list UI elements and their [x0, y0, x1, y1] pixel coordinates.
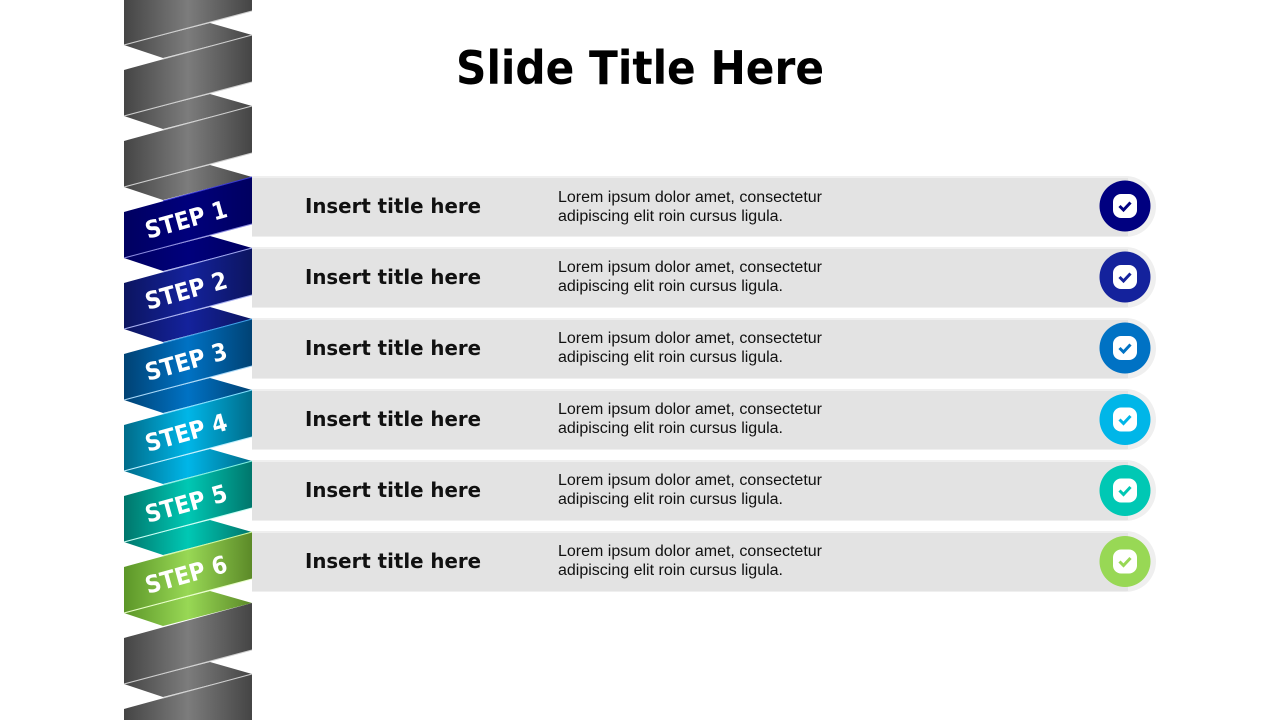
- row 6 description: adipiscing elit roin cursus ligula.: [558, 562, 783, 579]
- row 4 description: [558, 401, 822, 437]
- step 3 ribbon: [124, 319, 252, 413]
- row 6 description: Lorem ipsum dolor amet, consectetur: [558, 543, 822, 560]
- row 1 title: Insert title here: [305, 194, 481, 218]
- step 1 ribbon: [124, 177, 252, 271]
- row 4 description: adipiscing elit roin cursus ligula.: [558, 420, 783, 437]
- row 1: [252, 176, 1156, 237]
- row 3: [252, 318, 1156, 379]
- row 4 description: Lorem ipsum dolor amet, consectetur: [558, 401, 822, 418]
- row 5 check icon: [1100, 465, 1150, 516]
- row 3 description: [558, 330, 822, 366]
- step 1 label: STEP 1: [142, 195, 230, 245]
- row 2 check icon: [1100, 252, 1150, 302]
- row 6 title: Insert title here: [305, 549, 481, 573]
- step 3 label: STEP 3: [142, 337, 230, 387]
- row 3 description: adipiscing elit roin cursus ligula.: [558, 349, 783, 366]
- row 3 check icon: [1100, 322, 1150, 374]
- row 2 title: Insert title here: [305, 265, 481, 289]
- step 5 ribbon: [124, 461, 252, 555]
- row 1 description: [558, 189, 822, 225]
- row 6: [252, 531, 1156, 592]
- row 2 description: [558, 259, 822, 295]
- row 5: [252, 460, 1156, 521]
- row 1 check icon: [1100, 180, 1150, 232]
- row 2: [252, 247, 1156, 308]
- row 3 description: Lorem ipsum dolor amet, consectetur: [558, 330, 822, 347]
- step 6 ribbon: [124, 532, 252, 626]
- row 1 description: adipiscing elit roin cursus ligula.: [558, 208, 783, 225]
- row 4 check icon: [1100, 394, 1150, 445]
- row 1 description: Lorem ipsum dolor amet, consectetur: [558, 189, 822, 206]
- row 6 description: [558, 543, 822, 579]
- row 2 description: adipiscing elit roin cursus ligula.: [558, 278, 783, 295]
- spiral ribbon: grey top: [124, 0, 252, 200]
- step 6 label: STEP 6: [142, 550, 230, 600]
- row 6 check icon: [1100, 536, 1150, 587]
- row 3 title: Insert title here: [305, 336, 481, 360]
- row 2 description: Lorem ipsum dolor amet, consectetur: [558, 259, 822, 276]
- step 4 ribbon: [124, 390, 252, 484]
- row 4 title: Insert title here: [305, 407, 481, 431]
- row 5 title: Insert title here: [305, 478, 481, 502]
- row 5 description: adipiscing elit roin cursus ligula.: [558, 491, 783, 508]
- step 4 label: STEP 4: [142, 408, 230, 458]
- step 2 label: STEP 2: [142, 266, 230, 316]
- title: Slide Title Here: [456, 41, 824, 95]
- row 5 description: Lorem ipsum dolor amet, consectetur: [558, 472, 822, 489]
- spiral ribbon: grey bottom: [124, 603, 252, 720]
- step 5 label: STEP 5: [142, 479, 230, 529]
- row 5 description: [558, 472, 822, 508]
- step 2 ribbon: [124, 248, 252, 342]
- row 4: [252, 389, 1156, 450]
